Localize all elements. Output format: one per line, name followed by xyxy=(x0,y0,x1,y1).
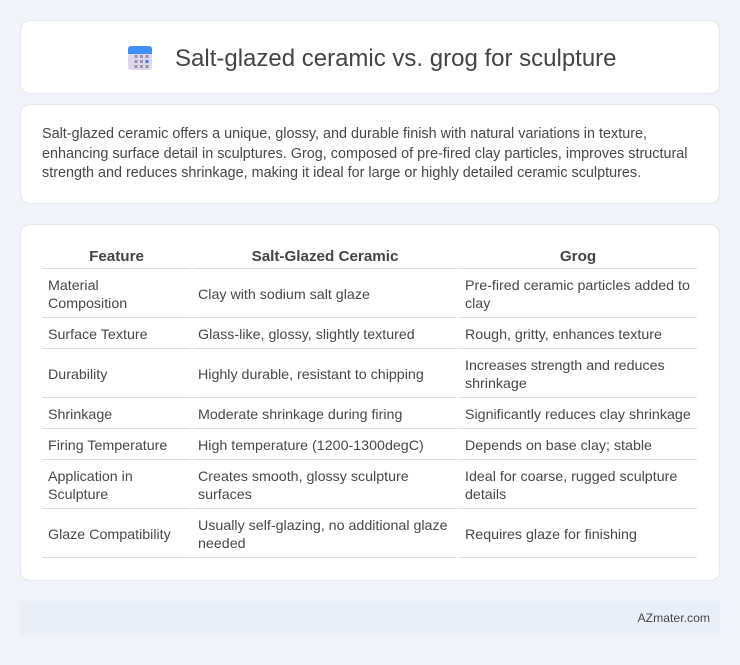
intro paragraph: Salt-glazed ceramic offers a unique, glossy, and durable finish with natural variations in texture, xyxy=(42,126,647,142)
intro paragraph xyxy=(42,126,687,181)
header: Grog: Grog xyxy=(560,248,596,265)
row: Firing Temperature: Firing Temperature xyxy=(48,438,167,454)
icon: calendar grid xyxy=(128,46,152,70)
comparison table: Usually self-glazing, no additional glaze xyxy=(198,518,448,534)
row: Application in Sculpture: Sculpture xyxy=(48,487,108,503)
header: Feature: Feature xyxy=(89,248,144,265)
comparison table: Clay with sodium salt glaze xyxy=(198,287,370,303)
row: Durability: Durability xyxy=(48,367,107,383)
comparison table: Glass-like, glossy, slightly textured xyxy=(198,327,415,343)
comparison table: High temperature (1200-1300degC) xyxy=(198,438,424,454)
row: Glaze Compatibility: Glaze Compatibility xyxy=(48,527,171,543)
table panel xyxy=(20,224,720,581)
comparison table: Pre-fired ceramic particles added to xyxy=(465,278,690,294)
comparison table: shrinkage xyxy=(465,376,527,392)
intro text panel xyxy=(20,104,720,204)
comparison table: Moderate shrinkage during firing xyxy=(198,407,402,423)
header: Salt-Glazed Ceramic: Salt-Glazed Ceramic xyxy=(252,248,398,265)
row: Material Composition: Material xyxy=(48,278,99,294)
comparison table: Creates smooth, glossy sculpture xyxy=(198,469,409,485)
comparison table: clay xyxy=(465,296,490,312)
footer bar xyxy=(20,601,720,635)
intro paragraph: enhancing surface detail in sculptures. Grog, composed of pre-fired clay particles, improves structural xyxy=(42,146,687,162)
row: Material Composition: Composition xyxy=(48,296,127,312)
title card xyxy=(20,20,720,94)
row: Application in Sculpture: Application in xyxy=(48,469,133,485)
comparison table: Requires glaze for finishing xyxy=(465,527,637,543)
comparison table: Highly durable, resistant to chipping xyxy=(198,367,424,383)
row: Surface Texture: Surface Texture xyxy=(48,327,148,343)
intro paragraph: strength and reduces shrinkage, making it ideal for large or highly detailed ceramic sculptures. xyxy=(42,165,641,181)
comparison table: needed xyxy=(198,536,246,552)
title: Salt-glazed ceramic vs. grog for sculpture xyxy=(175,45,617,72)
comparison table: Ideal for coarse, rugged sculpture xyxy=(465,469,677,485)
comparison table: Rough, gritty, enhances texture xyxy=(465,327,662,343)
row: Application in Sculpture xyxy=(48,469,133,503)
comparison table: Significantly reduces clay shrinkage xyxy=(465,407,691,423)
row: Material Composition xyxy=(48,278,127,312)
footer credit: AZmater.com xyxy=(638,611,710,625)
row: Shrinkage: Shrinkage xyxy=(48,407,112,423)
comparison table: Increases strength and reduces xyxy=(465,358,665,374)
comparison table: surfaces xyxy=(198,487,252,503)
comparison table: details xyxy=(465,487,506,503)
comparison table: Depends on base clay; stable xyxy=(465,438,652,454)
